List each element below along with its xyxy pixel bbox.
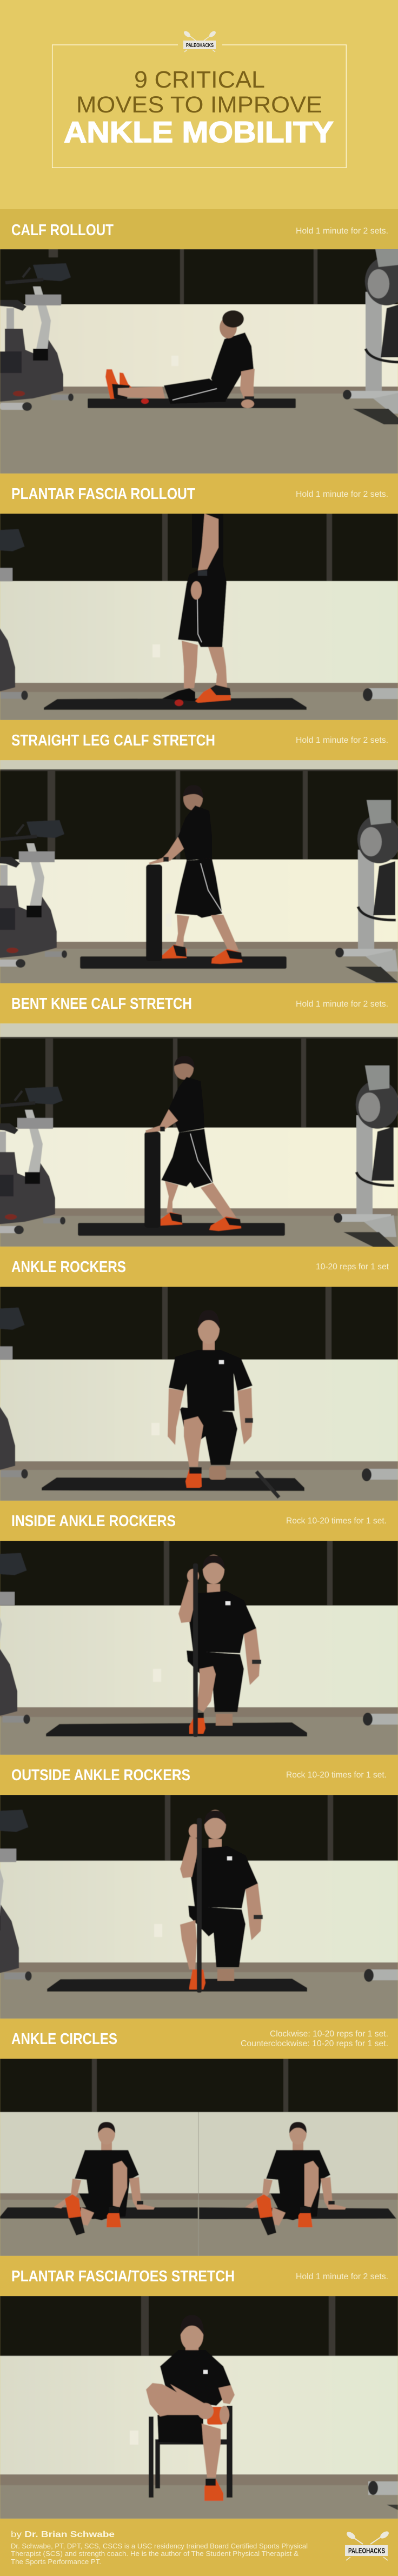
person seated, right view [245,2122,346,2235]
person kneeling with stick [178,1555,261,1734]
bar on floor [256,1472,279,1497]
heading: BENT KNEE CALF STRETCH [11,995,192,1013]
person kneeling [168,1310,253,1488]
band: calf rollout [0,209,398,249]
photo: ankle circles, two views [0,2059,398,2256]
chair [149,2406,233,2498]
heading: ANKLE CIRCLES [11,2031,117,2048]
author bio: Therapist (SCS) and strength coach. He is the author of The Student Physical Therapist & [11,2550,298,2558]
instruction: Rock 10-20 times for 1 set. [286,1770,387,1780]
band: inside ankle rockers [0,1501,398,1541]
title: MOVES TO IMPROVE [76,92,322,118]
logo: PaleoHacks: PALEOHACKS [186,42,214,49]
instruction: Hold 1 minute for 2 sets. [296,736,388,745]
instructions: Clockwise: 10-20 reps for 1 set. [270,2029,388,2039]
instruction: Hold 1 minute for 2 sets. [296,1000,388,1009]
title: 9 CRITICAL [134,66,265,93]
person seated stretching toes [146,2315,235,2501]
band: plantar fascia rollout [0,474,398,514]
photo: calf rollout [0,242,398,474]
foam roller [146,864,162,961]
heading: PLANTAR FASCIA ROLLOUT [11,485,195,503]
title: ANKLE MOBILITY [64,115,334,149]
photo: ankle rockers [0,1287,398,1501]
person kneeling with stick, knee out [180,1810,263,1989]
title [64,66,334,149]
photo: plantar fascia rollout [0,514,398,720]
frame border [52,45,346,168]
heading: CALF ROLLOUT [11,222,114,239]
author bio [11,2542,308,2566]
logo: PaleoHacks [345,2530,390,2560]
band: bent knee calf stretch [0,983,398,1023]
band: outside ankle rockers [0,1755,398,1795]
photo: straight leg calf stretch [0,760,398,983]
instruction: 10-20 reps for 1 set [316,1262,389,1272]
header panel [0,0,398,209]
person in bent knee stretch [145,1056,241,1231]
instruction: Hold 1 minute for 2 sets. [296,227,388,236]
footer panel [0,2519,398,2576]
author bio: The Sports Performance PT. [11,2558,101,2566]
instructions [241,2029,388,2048]
heading: INSIDE ANKLE ROCKERS [11,1513,176,1530]
band: plantar fascia/toes stretch [0,2256,398,2296]
instruction: Hold 1 minute for 2 sets. [296,2272,388,2281]
instruction: Hold 1 minute for 2 sets. [296,490,388,499]
person seated [105,310,255,408]
instructions: Counterclockwise: 10-20 reps for 1 set. [241,2039,388,2048]
instruction: Rock 10-20 times for 1 set. [286,1516,387,1526]
photo: inside ankle rockers [0,1541,398,1755]
logo: PaleoHacks: PALEOHACKS [348,2547,385,2555]
logo: PaleoHacks [183,30,217,52]
author byline: by Dr. Brian Schwabe [11,2530,115,2539]
band: straight leg calf stretch [0,720,398,760]
band: ankle circles [0,2019,398,2059]
photo: outside ankle rockers [0,1795,398,2019]
photo: plantar fascia / toes stretch [0,2296,398,2519]
band: ankle rockers [0,1247,398,1287]
heading: PLANTAR FASCIA/TOES STRETCH [11,2268,235,2285]
heading: OUTSIDE ANKLE ROCKERS [11,1767,190,1784]
stick [197,1818,202,1993]
person leaning on roller [149,785,242,964]
person seated, left view [54,2122,155,2235]
heading: STRAIGHT LEG CALF STRETCH [11,732,215,749]
person standing on ball [162,514,231,706]
stick [193,1563,198,1737]
author bio: Dr. Schwabe, PT, DPT, SCS, CSCS is a USC residency trained Board Certified Sports Physical [11,2542,308,2550]
foam roller [144,1131,161,1228]
photo: bent knee calf stretch [0,1023,398,1248]
heading: ANKLE ROCKERS [11,1259,126,1276]
